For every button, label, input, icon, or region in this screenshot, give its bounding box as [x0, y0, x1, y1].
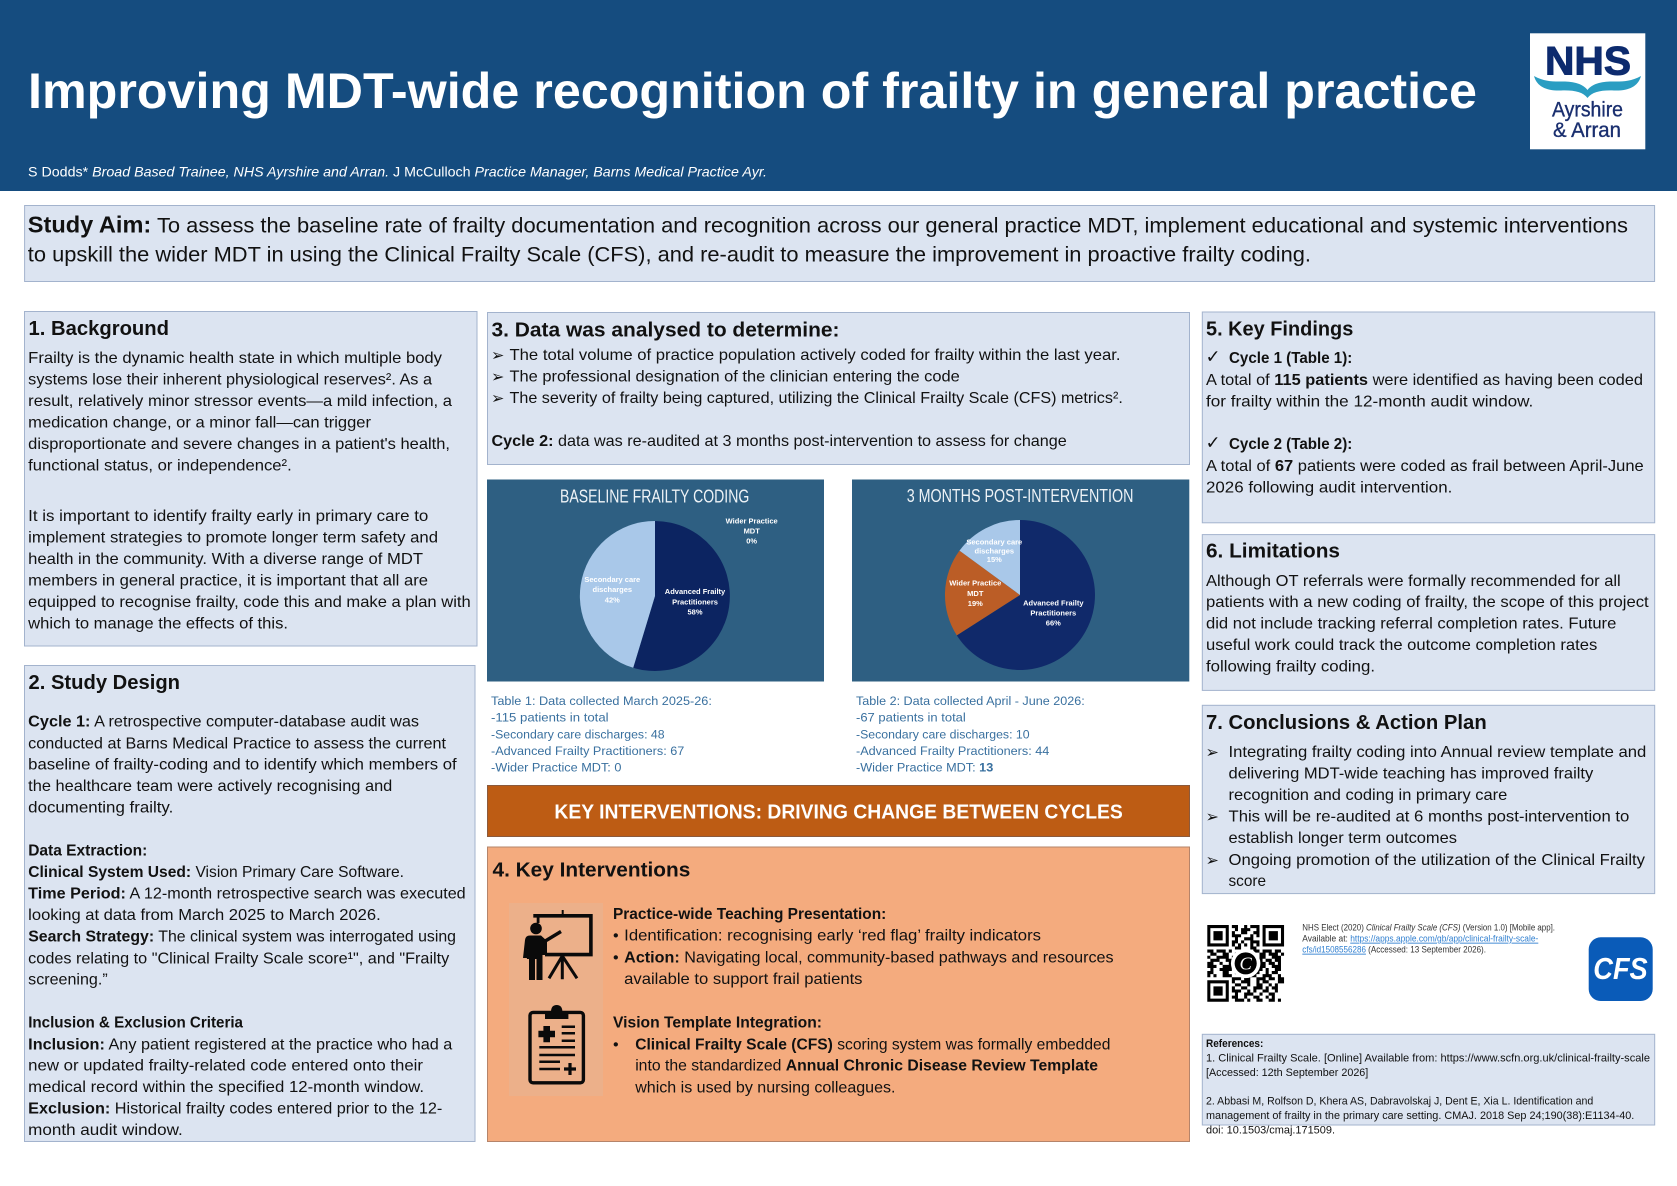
chart: baseline frailty coding pie: Wider Practice — [726, 516, 778, 525]
chart: 3 months post-intervention pie: discharges — [974, 546, 1014, 555]
table 1 caption: -Secondary care discharges: 48 — [491, 727, 665, 741]
heading: key interventions: 4. Key Interventions — [492, 859, 690, 882]
icon: presenter at board — [523, 910, 593, 980]
text block: data extraction: Time Period: A 12-month retrospective search was executed — [28, 886, 466, 903]
text block: teaching presentation — [613, 906, 1114, 988]
text block: vision template integration: Clinical Frailty Scale (CFS) scoring system was formally embedded — [635, 1036, 1110, 1053]
text block: frailty definition: functional status, or independence². — [28, 458, 292, 474]
panel: study aim: Study Aim: To assess the baseline rate of frailty documentation and recognition across our general practice MDT, implement educational and systemic interventions — [28, 212, 1628, 238]
table 2 caption: -67 patients in total — [856, 711, 966, 725]
bullet list: conclusions: This will be re-audited at 6 months post-intervention to — [1228, 808, 1629, 826]
finding: cycle 1: for frailty within the 12-month audit window. — [1206, 393, 1533, 410]
panel: key interventions — [488, 847, 1190, 1142]
table 2 caption: -Secondary care discharges: 10 — [856, 727, 1030, 741]
text block: frailty definition: Frailty is the dynamic health state in which multiple body — [28, 350, 442, 367]
panel: references: management of frailty in the primary care setting. CMAJ. 2018 Sep 24;190(38):E1134-40. — [1206, 1110, 1634, 1122]
chart: baseline frailty coding pie: BASELINE FRAILTY CODING — [560, 487, 749, 507]
chart: baseline frailty coding pie: 42% — [605, 596, 620, 605]
bullet list: conclusions: Integrating frailty coding into Annual review template and — [1228, 744, 1646, 761]
text block: frailty definition: result, relatively minor stressor events—a mild infection, a — [28, 393, 452, 410]
text block: why identify frailty: health in the community. With a diverse range of MDT — [28, 551, 423, 568]
bullet list: conclusions: ➢ — [1206, 850, 1219, 869]
chart: 3 months post-intervention pie: Wider Practice — [949, 579, 1001, 588]
chart: baseline frailty coding pie: 58% — [687, 608, 703, 617]
bullet list: analysis items — [491, 346, 1123, 408]
title: Improving MDT-wide recognition of frailty in general practice — [28, 63, 1477, 119]
icon: QR code: C — [1240, 954, 1253, 974]
text block: cycle 1: documenting frailty. — [28, 800, 173, 817]
text block: teaching presentation: Action: Navigating local, community-based pathways and resources — [624, 949, 1114, 966]
chart: 3 months post-intervention pie: Practitioners — [1030, 609, 1076, 618]
icon: CFS app — [1589, 937, 1653, 1001]
finding: cycle 2: 2026 following audit intervention. — [1206, 479, 1452, 496]
icon: clipboard — [530, 1005, 583, 1083]
citation: NHS Elect app: Available at: https://apps.apple.com/gb/app/clinical-frailty-scale- — [1302, 934, 1538, 944]
authors: S Dodds* Broad Based Trainee, NHS Ayrshire and Arran. J McCulloch Practice Manager, Barns Medical Practice Ayr. — [28, 164, 767, 180]
text block: why identify frailty: members in general practice, it is important that all are — [28, 572, 428, 590]
logo: NHS Ayrshire & Arran — [1530, 33, 1645, 149]
text block: why identify frailty — [27, 508, 471, 632]
text block: frailty definition — [28, 350, 452, 474]
bullet list: analysis items: The total volume of practice population actively coded for frailty within the last year. — [510, 347, 1120, 364]
text block: limitations: did not include tracking referral completion rates. Future — [1206, 616, 1616, 633]
panel: references: References: — [1206, 1038, 1263, 1050]
panel: study design — [24, 666, 475, 1142]
citation: NHS Elect app — [1302, 923, 1555, 955]
bullet list: analysis items: The severity of frailty being captured, utilizing the Clinical Frailty Scale (CFS) metrics². — [510, 390, 1123, 407]
chart: 3 months post-intervention pie: 66% — [1046, 619, 1061, 628]
finding: cycle 2: ✓ — [1206, 432, 1221, 454]
panel: limitations — [1202, 535, 1655, 690]
chart: 3 months post-intervention pie — [852, 480, 1189, 682]
text block: data extraction: Clinical System Used: Vision Primary Care Software. — [28, 864, 404, 881]
text block: data extraction: screening.” — [28, 971, 108, 988]
text block: vision template integration — [613, 1015, 1110, 1096]
panel: background — [24, 312, 477, 646]
icon: QR code — [1207, 925, 1284, 1002]
heading: key findings: 5. Key Findings — [1206, 318, 1353, 341]
logo: NHS Ayrshire & Arran: NHS — [1545, 39, 1631, 83]
bullet list: conclusions: delivering MDT-wide teaching has improved frailty — [1228, 766, 1593, 783]
panel: references: 2. Abbasi M, Rolfson D, Khera AS, Dabravolskaj J, Dent E, Xia L. Identification and — [1206, 1095, 1593, 1107]
table 1 caption — [491, 694, 712, 775]
text block: inclusion and exclusion criteria: Exclusion: Historical frailty codes entered prior to the 12- — [28, 1101, 442, 1118]
chart: baseline frailty coding pie: discharges — [592, 585, 632, 594]
chart: 3 months post-intervention pie: MDT — [967, 589, 984, 598]
text block: vision template integration: Vision Template Integration: — [613, 1015, 822, 1032]
text block: inclusion and exclusion criteria: new or updated frailty-related code entered onto their — [28, 1058, 424, 1075]
logo: NHS Ayrshire & Arran: Ayrshire — [1552, 99, 1623, 122]
finding: cycle 2: Cycle 2 (Table 2): — [1229, 436, 1352, 453]
text block: teaching presentation: available to support frail patients — [624, 971, 862, 988]
finding: cycle 1: A total of 115 patients were identified as having been coded — [1206, 372, 1643, 389]
panel: references: 1. Clinical Frailty Scale. [Online] Available from: https://www.scfn.org.uk/clinical-frailty-scale — [1206, 1053, 1650, 1065]
bullet list: conclusions: establish longer term outcomes — [1228, 830, 1457, 847]
chart: baseline frailty coding pie: Practitioners — [672, 597, 718, 606]
chart: baseline frailty coding pie: MDT — [744, 526, 760, 535]
text block: limitations: Although OT referrals were formally recommended for all — [1206, 573, 1621, 590]
chart: 3 months post-intervention pie: 3 MONTHS POST-INTERVENTION — [907, 486, 1133, 506]
table 2 caption: -Advanced Frailty Practitioners: 44 — [856, 744, 1049, 758]
text block: frailty definition: disproportionate and severe changes in a patient's health, — [28, 436, 450, 453]
text block: teaching presentation: Identification: recognising early ‘red flag’ frailty indicators — [624, 928, 1041, 945]
panel: references: doi: 10.1503/cmaj.171509. — [1206, 1124, 1335, 1136]
text block: cycle 1: baseline of frailty-coding and to identify which members of — [28, 757, 457, 774]
chart: baseline frailty coding pie: 0% — [746, 537, 757, 546]
panel: study aim — [25, 206, 1655, 282]
banner: key interventions: KEY INTERVENTIONS: DRIVING CHANGE BETWEEN CYCLES — [554, 801, 1123, 823]
text block: data extraction: codes relating to "Clinical Frailty Scale score¹", and "Frailty — [28, 950, 449, 967]
text block: data extraction: Data Extraction: — [28, 843, 147, 860]
bullet list: analysis items: ➢ — [491, 388, 504, 408]
table 2 caption: Table 2: Data collected April - June 2026: — [856, 694, 1085, 708]
text block: frailty definition: medication change, or a minor fall—can trigger — [28, 414, 372, 432]
bullet list: conclusions: ➢ — [1206, 807, 1219, 826]
bullet list: analysis items: ➢ — [491, 367, 504, 386]
bullet list: analysis items: ➢ — [491, 346, 504, 364]
table 1 caption: -Wider Practice MDT: 0 — [491, 761, 622, 775]
text block: limitations: patients with a new coding of frailty, the scope of this project — [1206, 594, 1649, 611]
chart: 3 months post-intervention pie: Secondary care — [966, 537, 1022, 546]
text block: cycle 1: the healthcare team were actively recognising and — [28, 778, 392, 795]
bullet list: conclusions: recognition and coding in primary care — [1228, 787, 1507, 804]
bullet list: conclusions — [1206, 743, 1646, 890]
chart: 3 months post-intervention pie: 15% — [987, 555, 1002, 564]
heading: data analysed: 3. Data was analysed to determine: — [492, 318, 840, 341]
text block: why identify frailty: implement strategies to promote longer term safety and — [28, 530, 438, 546]
text block: inclusion and exclusion criteria: Inclusion: Any patient registered at the practice who had a — [28, 1036, 452, 1053]
finding: cycle 2: A total of 67 patients were coded as frail between April-June — [1206, 458, 1644, 475]
banner: key interventions — [488, 786, 1190, 836]
panel: key findings — [1202, 312, 1655, 523]
bullet list: analysis items: The professional designation of the clinician entering the code — [510, 369, 960, 386]
logo: NHS Ayrshire & Arran: & Arran — [1553, 119, 1621, 142]
text block: data extraction: looking at data from March 2025 to March 2026. — [28, 907, 381, 924]
bullet list: conclusions: Ongoing promotion of the utilization of the Clinical Frailty — [1228, 852, 1645, 869]
table 1 caption: -115 patients in total — [491, 711, 609, 725]
chart: baseline frailty coding pie — [487, 480, 824, 682]
panel: study aim: to upskill the wider MDT in using the Clinical Frailty Scale (CFS), and re-audit to measure the improvement in proactive frailty coding. — [28, 243, 1311, 267]
table 1 caption: -Advanced Frailty Practitioners: 67 — [491, 744, 684, 758]
text block: inclusion and exclusion criteria: month audit window. — [28, 1122, 183, 1139]
text block: limitations: following frailty coding. — [1206, 658, 1375, 676]
text block: why identify frailty: It is important to identify frailty early in primary care to — [28, 508, 428, 525]
text block: why identify frailty: which to manage the effects of this. — [27, 616, 288, 632]
citation: NHS Elect app: NHS Elect (2020) Clinical Frailty Scale (CFS) (Version 1.0) [Mobile app]. — [1302, 923, 1555, 933]
text block: data extraction — [28, 843, 466, 988]
text block: inclusion and exclusion criteria — [28, 1015, 452, 1139]
heading: limitations: 6. Limitations — [1206, 540, 1340, 562]
text block: cycle 1: conducted at Barns Medical Practice to assess the current — [28, 735, 447, 752]
chart: baseline frailty coding pie: Secondary care — [584, 575, 640, 584]
table 1 caption: Table 1: Data collected March 2025-26: — [491, 694, 712, 708]
text block: teaching presentation: • — [613, 928, 619, 945]
bullet list: conclusions: ➢ — [1206, 743, 1219, 762]
heading: background: 1. Background — [28, 317, 169, 340]
text block: cycle 1 — [28, 714, 457, 817]
heading: study design: 2. Study Design — [28, 671, 180, 694]
citation: NHS Elect app: cfs/id1508556286 (Accessed: 13 September 2026). — [1302, 945, 1486, 955]
chart: 3 months post-intervention pie: Advanced Frailty — [1023, 598, 1084, 607]
text block: vision template integration: which is used by nursing colleagues. — [634, 1079, 896, 1096]
text block: cycle 2: Cycle 2: data was re-audited at 3 months post-intervention to assess for change — [492, 433, 1067, 450]
table 2 caption: -Wider Practice MDT: 13 — [856, 761, 993, 775]
heading: conclusions: 7. Conclusions & Action Plan — [1206, 711, 1487, 734]
text block: limitations — [1206, 573, 1649, 676]
table 2 caption — [856, 694, 1085, 775]
finding: cycle 1: Cycle 1 (Table 1): — [1229, 350, 1352, 367]
chart: baseline frailty coding pie: Advanced Frailty — [665, 587, 726, 596]
text block: limitations: useful work could track the outcome completion rates — [1206, 637, 1597, 654]
panel: conclusions and action plan — [1202, 705, 1655, 894]
panel: references: [Accessed: 12th September 2026] — [1206, 1067, 1368, 1079]
text block: vision template integration: • — [613, 1036, 619, 1053]
icon: CFS app: CFS — [1593, 951, 1648, 986]
text block: teaching presentation: Practice-wide Teaching Presentation: — [613, 906, 886, 923]
text block: vision template integration: into the standardized Annual Chronic Disease Review Template — [635, 1058, 1098, 1075]
header banner — [0, 0, 1677, 191]
finding: cycle 1: ✓ — [1206, 346, 1221, 368]
bullet list: conclusions: score — [1228, 873, 1266, 890]
text block: data extraction: Search Strategy: The clinical system was interrogated using — [28, 929, 456, 946]
panel: data analysed — [488, 312, 1190, 464]
text block: cycle 1: Cycle 1: A retrospective computer-database audit was — [28, 714, 419, 731]
text block: inclusion and exclusion criteria: medical record within the specified 12-month window. — [28, 1079, 424, 1096]
text block: frailty definition: systems lose their inherent physiological reserves². As a — [28, 372, 432, 388]
chart: 3 months post-intervention pie: 19% — [968, 599, 983, 608]
finding: cycle 1 — [1206, 346, 1643, 410]
text block: inclusion and exclusion criteria: Inclusion & Exclusion Criteria — [28, 1015, 243, 1032]
text block: why identify frailty: equipped to recognise frailty, code this and make a plan with — [28, 594, 471, 611]
panel: references — [1202, 1034, 1655, 1136]
finding: cycle 2 — [1206, 432, 1644, 496]
text block: teaching presentation: • — [613, 949, 619, 966]
